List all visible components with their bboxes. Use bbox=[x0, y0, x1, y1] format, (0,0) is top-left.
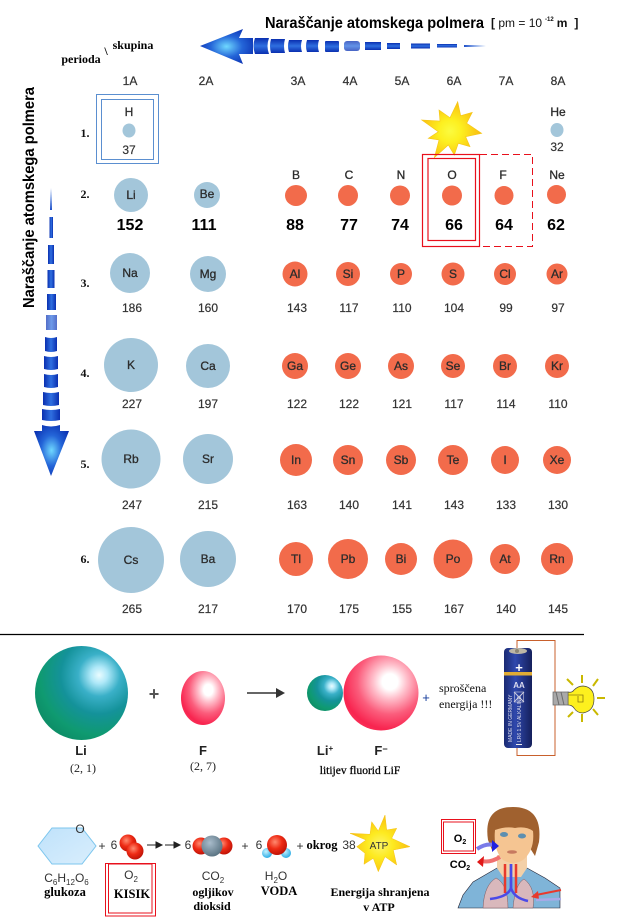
row 2: 64 bbox=[495, 217, 513, 234]
molecule: carbon dioxide bbox=[192, 836, 232, 856]
row 5: 163 bbox=[287, 498, 307, 512]
column headers: 8A bbox=[551, 74, 565, 88]
face bbox=[495, 827, 533, 863]
row 3: 117 bbox=[339, 301, 359, 315]
unit note: [ pm = 10 bbox=[491, 16, 542, 30]
row 2: F bbox=[499, 168, 507, 182]
row 3: Cl bbox=[499, 267, 511, 281]
row 1: 37 bbox=[122, 143, 136, 157]
row 6: 167 bbox=[444, 602, 464, 616]
period numbers: 4. bbox=[80, 366, 90, 380]
icon: AA battery: MADE IN GERMANY bbox=[508, 694, 514, 742]
respiration equation: + bbox=[296, 839, 304, 853]
row 6: Tl bbox=[291, 552, 301, 566]
row 3: Ar bbox=[551, 267, 563, 281]
eyes and mouth bbox=[500, 832, 526, 854]
lungs bbox=[483, 878, 534, 908]
row 2: C bbox=[345, 168, 354, 182]
row 2: 111 bbox=[192, 217, 217, 234]
highlight: hydrogen double box bbox=[96, 94, 158, 164]
body bbox=[458, 868, 560, 908]
arrow: radius grows downward bbox=[34, 188, 69, 476]
row 6: 175 bbox=[339, 602, 359, 616]
arrow: radius grows to the left bbox=[200, 29, 486, 64]
row 2: 77 bbox=[340, 217, 358, 234]
unit note: -12 bbox=[545, 17, 554, 23]
unit note: m bbox=[557, 16, 567, 30]
column headers: 4A bbox=[343, 74, 357, 88]
icon: AA battery: LR6 1.5V ALKALINE bbox=[517, 695, 523, 742]
respiration equation: H bbox=[265, 869, 273, 883]
row 4: Br bbox=[499, 359, 511, 373]
period numbers: 2. bbox=[80, 187, 90, 201]
respiration equation: 2 bbox=[133, 875, 138, 884]
row 6: Cs bbox=[124, 553, 138, 567]
icon: AA battery: AA bbox=[513, 681, 525, 690]
period numbers: 1. bbox=[80, 126, 90, 140]
respiration equation: + bbox=[98, 839, 106, 853]
icon: sun over oxygen bbox=[422, 102, 482, 158]
row 6: Po bbox=[446, 552, 461, 566]
highlight: fluorine dashed box bbox=[480, 154, 532, 246]
period numbers: 6. bbox=[80, 552, 90, 566]
respiration equation: 6 bbox=[111, 838, 118, 852]
axis label: perioda / skupina: \ bbox=[103, 44, 108, 58]
released energy text: energija !!! bbox=[439, 697, 492, 711]
row 5: Sr bbox=[202, 452, 214, 466]
glucose ring: O bbox=[75, 822, 85, 836]
row 3: 110 bbox=[392, 301, 412, 315]
row 3: Na bbox=[122, 266, 138, 280]
column headers: 1A bbox=[123, 74, 137, 88]
row 4: Ca bbox=[200, 359, 216, 373]
row 5: 133 bbox=[496, 498, 516, 512]
row 5: Sn bbox=[341, 453, 355, 467]
respiration equation: dioksid bbox=[193, 899, 231, 913]
row 3: 143 bbox=[287, 301, 307, 315]
airway arrows bbox=[490, 864, 528, 901]
row 2: Li bbox=[126, 188, 136, 202]
sphere: F atom bbox=[181, 671, 225, 725]
row 2: 62 bbox=[547, 217, 565, 234]
row 6: 145 bbox=[548, 602, 568, 616]
icon: ATP star bbox=[350, 815, 410, 872]
glucose ring: C bbox=[44, 871, 53, 885]
glucose ring: O bbox=[75, 871, 84, 885]
row 3: 99 bbox=[499, 301, 513, 315]
row 5: 141 bbox=[392, 498, 412, 512]
reaction arrow bbox=[247, 688, 285, 698]
unit note: ] bbox=[574, 16, 578, 30]
glucose ring bbox=[38, 822, 96, 899]
illustration: boy breathing: 2 bbox=[466, 865, 470, 872]
row 4: 227 bbox=[122, 397, 142, 411]
icon: AA battery: + bbox=[515, 660, 523, 675]
row 1: 32 bbox=[550, 140, 564, 154]
row 3: 186 bbox=[122, 301, 142, 315]
respiration equation: okrog bbox=[306, 838, 338, 852]
row 6: Bi bbox=[396, 552, 406, 566]
icon: light bulb bbox=[553, 675, 605, 722]
row 4: Se bbox=[446, 359, 461, 373]
row 4: As bbox=[394, 359, 408, 373]
row 5 bbox=[102, 430, 571, 512]
released energy text bbox=[422, 681, 492, 711]
respiration equation: 6 bbox=[185, 838, 192, 852]
row 5: Rb bbox=[123, 452, 139, 466]
icon: ATP star: ATP bbox=[370, 841, 389, 852]
illustration: boy breathing: 2 bbox=[462, 839, 466, 846]
row 4: 110 bbox=[548, 397, 568, 411]
row 4: 121 bbox=[392, 397, 412, 411]
respiration equation: CO bbox=[202, 869, 220, 883]
sphere: F ion bbox=[344, 656, 418, 730]
row 6: Pb bbox=[341, 552, 356, 566]
respiration equation: 38 bbox=[342, 838, 356, 852]
column headers: 6A bbox=[447, 74, 461, 88]
row 4: Kr bbox=[551, 359, 563, 373]
molecule: water bbox=[262, 835, 291, 858]
row 3 bbox=[110, 253, 568, 315]
glucose ring: glukoza bbox=[44, 885, 87, 899]
reaction: lithium and fluorine: + bbox=[149, 684, 159, 704]
row 5: 130 bbox=[548, 498, 568, 512]
column headers: 5A bbox=[395, 74, 409, 88]
reaction: lithium and fluorine: F bbox=[374, 743, 382, 758]
row 5: 140 bbox=[339, 498, 359, 512]
reaction: lithium and fluorine: litijev fluorid LiF bbox=[320, 765, 400, 777]
row 2: O bbox=[447, 168, 457, 182]
respiration equation: KISIK bbox=[114, 887, 150, 901]
row 4: 122 bbox=[287, 397, 307, 411]
axis label: perioda / skupina: perioda bbox=[61, 52, 101, 66]
row 6: Rn bbox=[549, 552, 565, 566]
reaction: lithium and fluorine bbox=[35, 646, 418, 777]
row 4: 197 bbox=[198, 397, 218, 411]
row 5: 143 bbox=[444, 498, 464, 512]
row 5: Te bbox=[447, 453, 460, 467]
respiration equation: O bbox=[124, 868, 133, 882]
respiration equation: v ATP bbox=[363, 900, 395, 914]
row 3: 160 bbox=[198, 301, 218, 315]
respiration equation: O bbox=[278, 869, 287, 883]
row 6: 140 bbox=[496, 602, 516, 616]
glucose ring: 12 bbox=[66, 878, 75, 887]
oxygen highlight box bbox=[106, 864, 156, 916]
illustration: boy breathing: O bbox=[454, 833, 462, 845]
row 4: Ga bbox=[287, 359, 303, 373]
row 3: 104 bbox=[444, 301, 464, 315]
reaction: lithium and fluorine: (2, 1) bbox=[70, 761, 96, 775]
period numbers: 3. bbox=[80, 276, 90, 290]
illustration: boy breathing bbox=[442, 807, 561, 908]
respiration equation: 2 bbox=[273, 876, 278, 885]
respiration equation: 2 bbox=[220, 876, 225, 885]
row 4: 122 bbox=[339, 397, 359, 411]
illustration: boy breathing: CO bbox=[450, 859, 466, 871]
column headers bbox=[123, 74, 565, 88]
glucose ring: H bbox=[57, 871, 66, 885]
title: horizontal: Naraščanje atomskega polmera bbox=[265, 15, 484, 32]
glucose ring: 6 bbox=[53, 878, 58, 887]
row 1: H bbox=[125, 105, 133, 119]
respiration equation: VODA bbox=[261, 884, 297, 898]
reaction: lithium and fluorine: − bbox=[382, 744, 388, 754]
row 6: 217 bbox=[198, 602, 218, 616]
row 5: In bbox=[291, 453, 301, 467]
row 2: Ne bbox=[549, 168, 565, 182]
row 2: 66 bbox=[445, 217, 463, 234]
highlight: oxygen red box bbox=[422, 154, 480, 246]
row 3: Si bbox=[343, 267, 353, 281]
arrows bbox=[147, 842, 180, 848]
row 3: P bbox=[397, 267, 405, 281]
molecule: oxygen bbox=[120, 834, 144, 860]
arrow: exhaled carbon dioxide bbox=[477, 856, 500, 867]
row 6: 265 bbox=[122, 602, 142, 616]
arrow head bbox=[34, 425, 69, 476]
row 1: He bbox=[550, 105, 566, 119]
arrows: lung side bbox=[531, 890, 561, 900]
glucose ring: 6 bbox=[84, 878, 89, 887]
row 5: 215 bbox=[198, 498, 218, 512]
axis label: perioda / skupina bbox=[61, 38, 153, 66]
row 2: B bbox=[292, 168, 300, 182]
respiration equation: Energija shranjena bbox=[330, 885, 430, 899]
reaction: lithium and fluorine: Li bbox=[317, 743, 328, 758]
row 2: Be bbox=[200, 187, 215, 201]
row 3: Al bbox=[290, 267, 300, 281]
row 2: 152 bbox=[117, 217, 143, 234]
row 2 bbox=[114, 168, 566, 234]
released energy text: sproščena bbox=[439, 681, 487, 695]
column headers: 2A bbox=[199, 74, 213, 88]
axis label: perioda / skupina: skupina bbox=[113, 38, 153, 52]
icon: AA battery bbox=[504, 648, 532, 748]
row 4: K bbox=[127, 358, 135, 372]
reaction: lithium and fluorine: (2, 7) bbox=[190, 759, 216, 773]
reaction: lithium and fluorine: + bbox=[328, 744, 333, 753]
respiration equation: 6 bbox=[256, 838, 263, 852]
row 6: 170 bbox=[287, 602, 307, 616]
row 4: 114 bbox=[496, 397, 516, 411]
row 3: 97 bbox=[551, 301, 565, 315]
sphere: Li atom bbox=[35, 646, 128, 740]
row 2: 74 bbox=[391, 217, 409, 234]
sphere: Li ion bbox=[307, 675, 343, 711]
row 5: 247 bbox=[122, 498, 142, 512]
row 2: N bbox=[397, 168, 405, 182]
reaction: lithium and fluorine: Li bbox=[75, 743, 87, 758]
row 5: Xe bbox=[550, 453, 565, 467]
row 4: 117 bbox=[444, 397, 464, 411]
row 4: Ge bbox=[340, 359, 356, 373]
period numbers bbox=[80, 126, 90, 566]
row 6 bbox=[98, 527, 573, 616]
released energy text: + bbox=[422, 690, 430, 705]
neck bbox=[497, 855, 527, 877]
hair bbox=[487, 807, 539, 856]
row 6: 155 bbox=[392, 602, 412, 616]
battery circuit wire bbox=[517, 640, 555, 756]
row 4 bbox=[104, 338, 569, 411]
period numbers: 5. bbox=[80, 457, 90, 471]
row 5: Sb bbox=[394, 453, 409, 467]
oxygen box bbox=[442, 820, 476, 854]
row 2: 88 bbox=[286, 217, 304, 234]
row 6: Ba bbox=[201, 552, 216, 566]
arrow: inhaled oxygen bbox=[477, 840, 499, 852]
row 5: I bbox=[503, 453, 507, 467]
row 3: Mg bbox=[200, 267, 216, 281]
column headers: 3A bbox=[291, 74, 305, 88]
respiration equation: + bbox=[241, 839, 249, 853]
column headers: 7A bbox=[499, 74, 513, 88]
respiration equation: ogljikov bbox=[192, 885, 234, 899]
reaction: lithium and fluorine: F bbox=[199, 743, 207, 758]
row 1 bbox=[122, 105, 566, 157]
row 3: S bbox=[449, 267, 457, 281]
respiration equation bbox=[38, 815, 430, 916]
vertical title: Naraščanje atomskega polmera bbox=[21, 87, 38, 308]
row 6: At bbox=[499, 552, 511, 566]
